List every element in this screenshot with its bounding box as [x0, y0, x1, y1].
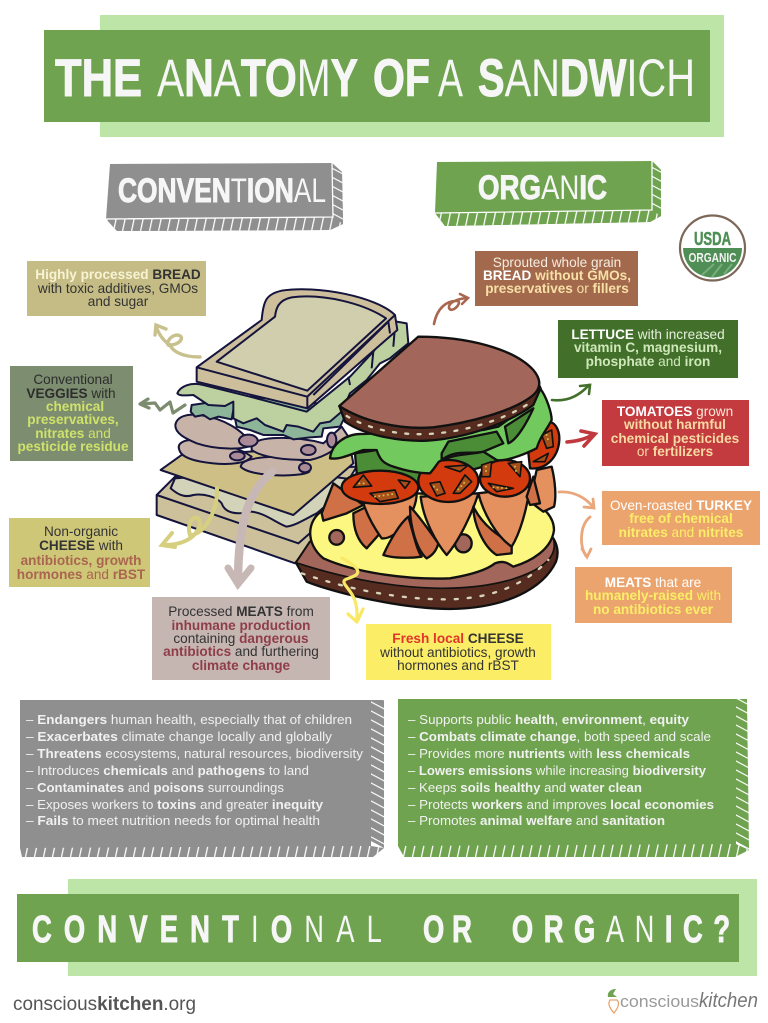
callout: processed meats: inhumane production — [172, 618, 310, 633]
meat slices — [179, 440, 252, 464]
callout: processed meats: climate change — [192, 658, 291, 673]
callout: fresh cheese: hormones and rBST — [397, 658, 519, 673]
panel: organic impacts: – Promotes animal welfare and sanitation — [408, 813, 665, 828]
dark lettuce — [191, 397, 350, 439]
panel: organic impacts: – Supports public health, environment, equity — [408, 712, 690, 727]
callout: turkey — [602, 491, 760, 545]
title banner — [44, 15, 724, 137]
banner question: OR — [423, 909, 472, 951]
label: organic: ORGANIC — [478, 169, 607, 207]
arrow: processed meats — [228, 472, 272, 584]
arrow: organic bread — [434, 294, 468, 324]
title: THE — [55, 49, 142, 108]
callout: fresh cheese: Fresh local CHEESE — [392, 631, 524, 646]
arrow: lettuce — [552, 385, 590, 400]
callout: turkey: nitrates and nitrites — [619, 525, 743, 540]
callout: conventional veggies: Conventional — [33, 372, 113, 387]
icon: USDA organic seal — [680, 216, 745, 280]
panel: conventional impacts: – Fails to meet nutrition needs for optimal health — [26, 813, 320, 828]
panel: organic impacts — [398, 699, 749, 857]
callout: processed meats — [152, 597, 330, 680]
callout: processed meats: antibiotics and furthering — [163, 644, 319, 659]
label: conventional — [106, 163, 343, 231]
icon: USDA organic seal: USDA — [694, 229, 731, 249]
panel: conventional impacts: – Exposes workers to toxins and greater inequity — [26, 797, 324, 812]
callout: conventional bread: with toxic additives, GMOs — [37, 281, 198, 296]
tomatoes — [527, 422, 559, 468]
logo: conscious kitchen: conscious — [620, 992, 699, 1011]
illustration: organic sandwich — [296, 337, 559, 609]
title: A — [438, 49, 463, 108]
panel: organic impacts: – Provides more nutrients with less chemicals — [408, 746, 690, 761]
callout: tomatoes — [602, 400, 749, 466]
arrow: conventional veggies — [140, 399, 185, 413]
callout: lettuce: LETTUCE with increased — [571, 327, 725, 342]
lettuce top — [177, 322, 408, 432]
callout: tomatoes: chemical pesticides — [611, 431, 739, 446]
bottom bread — [296, 538, 558, 609]
callout: processed meats: Processed MEATS from — [168, 604, 314, 619]
callout: conventional veggies: VEGGIES with — [26, 386, 116, 401]
label: conventional: CONVENTIONAL — [118, 172, 326, 210]
callout: humane meats — [575, 567, 732, 623]
callout: conventional veggies: pesticide residue — [17, 439, 129, 454]
top bread — [197, 289, 397, 408]
callout: organic bread: Sprouted whole grain — [493, 255, 621, 270]
callout: conventional cheese: antibiotics, growth — [21, 553, 141, 568]
callout: conventional veggies — [10, 366, 133, 461]
tomato seeds — [359, 435, 549, 497]
cheese — [310, 493, 554, 579]
callout: organic bread — [475, 251, 638, 306]
title: OF — [373, 49, 430, 108]
arrow: tomatoes — [567, 431, 595, 446]
callout: conventional veggies: nitrates and — [35, 426, 111, 441]
arrow: fresh cheese — [342, 558, 363, 622]
title: SANDWICH — [478, 49, 695, 108]
callout: turkey: Oven-roasted TURKEY — [610, 498, 752, 513]
callout: tomatoes: without harmful — [623, 417, 726, 432]
callout: fresh cheese: without antibiotics, growth — [379, 645, 536, 660]
logo: conscious kitchen — [608, 989, 758, 1013]
bottom banner — [17, 879, 757, 976]
callout: conventional cheese: CHEESE with — [39, 538, 123, 553]
callout: lettuce: vitamin C, magnesium, — [574, 340, 722, 355]
banner question — [32, 909, 730, 951]
callout: tomatoes: TOMATOES grown — [617, 404, 733, 419]
callout: organic bread: preservatives or fillers — [485, 281, 629, 296]
panel: conventional impacts — [20, 700, 384, 857]
callout: conventional bread: and sugar — [88, 294, 149, 309]
title: ANATOMY — [157, 49, 358, 108]
turkey slices — [530, 467, 555, 512]
top bread — [339, 380, 541, 441]
dark lettuce back — [355, 410, 547, 483]
arrow: meats — [581, 517, 591, 557]
callout: conventional cheese — [9, 518, 150, 587]
banner question: CONVENT I O NAL — [32, 909, 382, 951]
callout: conventional bread: Highly processed BREAD — [35, 267, 201, 282]
panel: conventional impacts: – Exacerbates climate change locally and globally — [26, 729, 333, 744]
panel: conventional impacts: – Introduces chemicals and pathogens to land — [26, 763, 309, 778]
bottom bread — [157, 467, 357, 563]
arrow: conventional cheese — [162, 488, 217, 547]
panel: conventional impacts: – Threatens ecosystems, natural resources, biodiversity — [26, 746, 364, 761]
processed cheese — [161, 447, 353, 515]
panel: conventional impacts: – Endangers human health, especially that of children — [26, 712, 352, 727]
icon: carrot — [608, 989, 618, 1013]
callout: tomatoes: or fertilizers — [637, 444, 713, 459]
callout: conventional cheese: Non-organic — [44, 524, 118, 539]
callout: humane meats: no antibiotics ever — [593, 602, 714, 617]
icon: USDA organic seal: ORGANIC — [688, 250, 737, 265]
arrow: turkey — [559, 492, 594, 508]
title — [55, 49, 695, 108]
arrow: conventional bread — [155, 325, 200, 357]
logo: conscious kitchen: kitchen — [699, 990, 758, 1012]
label: organic — [435, 161, 661, 226]
callout: turkey: free of chemical — [629, 511, 733, 526]
callout: fresh cheese — [366, 624, 551, 680]
illustration: conventional sandwich — [157, 289, 408, 563]
callout: organic bread: BREAD without GMOs, — [483, 268, 631, 283]
callout: conventional bread — [27, 261, 206, 316]
callout: conventional veggies: preservatives, — [27, 412, 119, 427]
callout: humane meats: MEATS that are — [605, 575, 701, 590]
panel: conventional impacts: – Contaminates and poisons surroundings — [26, 780, 284, 795]
lettuce — [330, 388, 552, 473]
callout: processed meats: containing dangerous — [173, 631, 309, 646]
panel: organic impacts: – Protects workers and improves local economies — [408, 797, 714, 812]
panel: organic impacts: – Keeps soils healthy and water clean — [408, 780, 642, 795]
callout: humane meats: humanely-raised with — [585, 588, 721, 603]
callout: lettuce — [558, 320, 738, 378]
panel: organic impacts: – Lowers emissions while increasing biodiversity — [408, 763, 707, 778]
panel: organic impacts: – Combats climate change , both speed and scale — [408, 729, 711, 744]
callout: conventional veggies: chemical — [46, 399, 104, 414]
lower lettuce — [171, 470, 357, 527]
website url: consciouskitchen.org — [13, 994, 196, 1015]
callout: conventional cheese: hormones and rBST — [17, 567, 146, 582]
banner question: ORG AN IC? — [512, 909, 730, 951]
callout: lettuce: phosphate and iron — [586, 354, 710, 369]
